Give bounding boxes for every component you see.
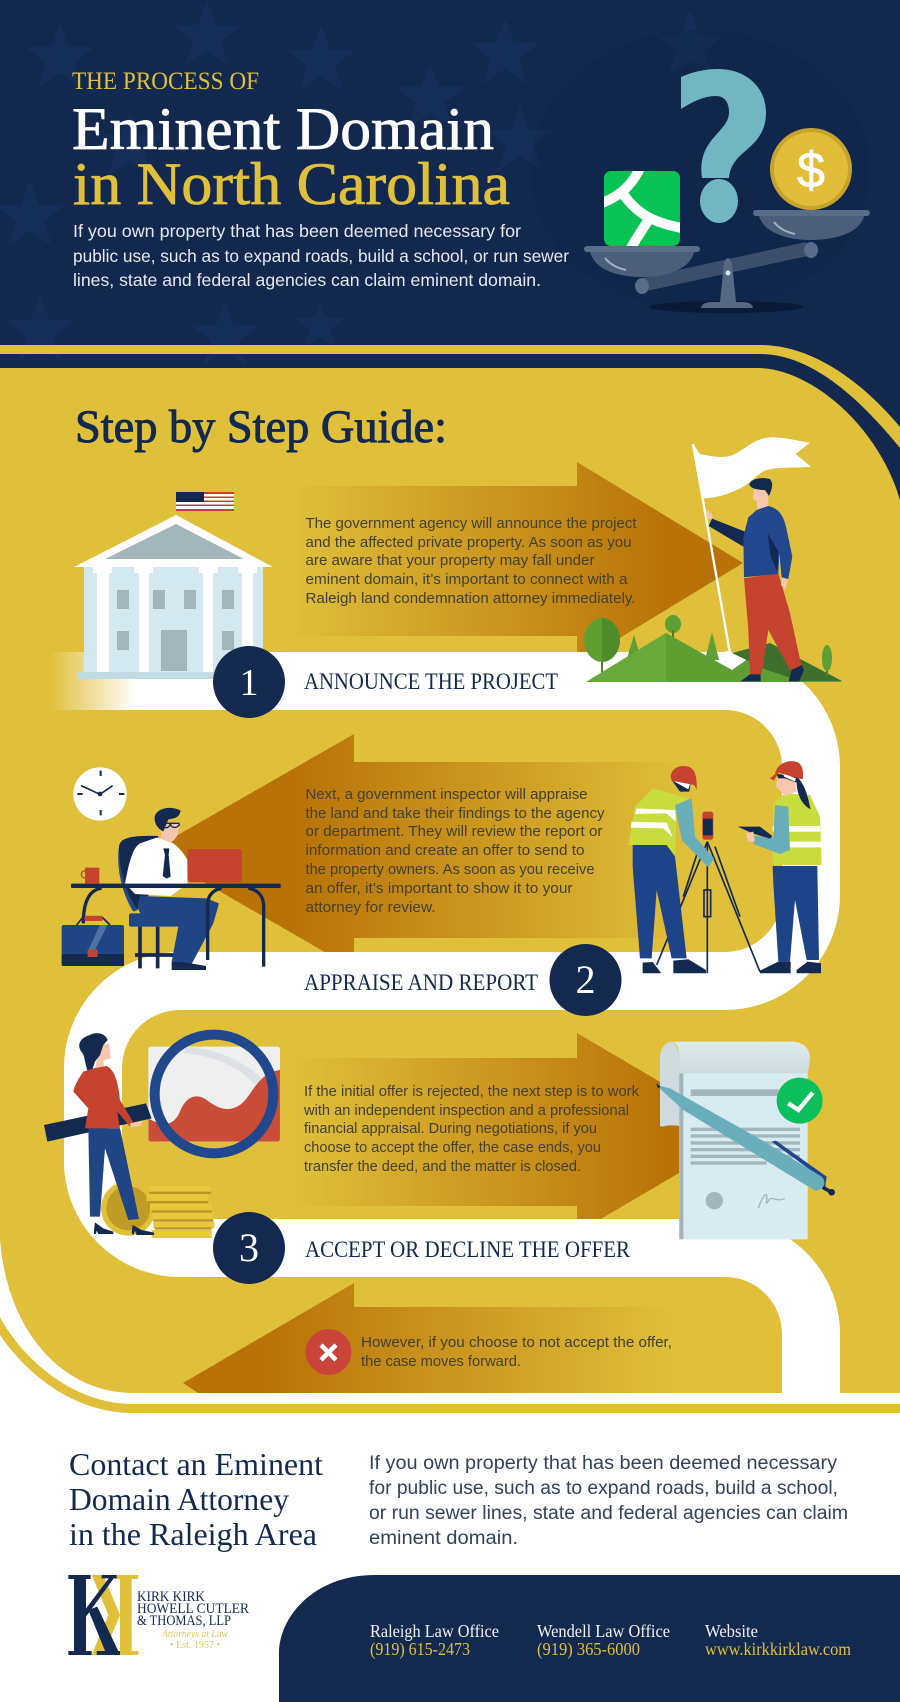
intro paragraph	[73, 221, 569, 290]
text: step 3 description: choose to accept the offer, the case ends, you	[304, 1140, 601, 1156]
logo: kirk kirk howell cutler and thomas	[68, 1575, 249, 1655]
scale base and beam	[635, 242, 818, 313]
red mug	[81, 868, 99, 884]
logo text: KIRK KIRK	[137, 1589, 205, 1605]
arrow: step 4	[183, 1283, 690, 1393]
step 2 badge: 2	[576, 957, 596, 1002]
logo text	[137, 1589, 249, 1651]
clock	[73, 767, 127, 821]
illustration: man at desk with clock	[62, 767, 281, 970]
logo text: • Est. 1957 •	[170, 1640, 220, 1651]
contact heading	[69, 1446, 323, 1552]
text: step 4 description: the case moves forward.	[361, 1354, 521, 1370]
winding white road	[50, 652, 811, 1396]
footer panel	[279, 1575, 900, 1702]
tripod	[657, 812, 760, 973]
intro paragraph: lines, state and federal agencies can claim eminent domain.	[73, 270, 541, 290]
bottom gold stripe	[0, 1317, 900, 1413]
contact: raleigh office: Raleigh Law Office	[370, 1621, 499, 1641]
step 2 label: APPRAISE AND REPORT	[304, 970, 538, 995]
surveyor man	[628, 766, 714, 973]
contact: wendell office: (919) 365-6000	[537, 1639, 640, 1659]
green land parcel	[604, 171, 680, 246]
step 2 badge	[550, 944, 622, 1016]
step 1 label: ANNOUNCE THE PROJECT	[304, 669, 558, 694]
text: step 2 description: an offer, it’s important to show it to your	[306, 881, 573, 897]
text: step 2 description: the property owners. As soon as you receive	[306, 862, 594, 878]
green check badge	[777, 1078, 823, 1124]
chair	[119, 836, 158, 910]
text: step 1 description: The government agency will announce the project	[306, 516, 636, 532]
illustration: scales with question mark	[584, 69, 870, 313]
text: step 1 description: Raleigh land condemnation attorney immediately.	[306, 591, 636, 607]
step 1 badge: 1	[240, 662, 258, 704]
text: step 2 description: Next, a government inspector will appraise	[306, 787, 588, 803]
text: step 2 description: the land and take their findings to the agency	[306, 806, 605, 822]
text: step 3 description: with an independent inspection and a professional	[303, 1103, 629, 1119]
flag pole	[693, 444, 733, 656]
right pan	[753, 210, 870, 240]
contact heading: in the Raleigh Area	[69, 1516, 317, 1552]
desk	[71, 884, 281, 967]
contact: wendell office	[537, 1621, 670, 1659]
intro paragraph: public use, such as to expand roads, build a school, or run sewer	[73, 246, 569, 266]
flag	[693, 437, 811, 498]
arrow: step 3	[290, 1033, 747, 1233]
text: step 1 description: eminent domain, it’s important to connect with a	[306, 572, 628, 588]
text: step 3 description	[303, 1084, 640, 1175]
coins	[101, 1181, 214, 1238]
contact: wendell office: Wendell Law Office	[537, 1621, 670, 1641]
paper	[660, 1042, 810, 1239]
step 3 badge: 3	[239, 1225, 259, 1270]
arrow: step 1	[285, 462, 743, 664]
question mark	[681, 69, 766, 223]
logo mark	[68, 1575, 138, 1655]
illustration: surveyors with tripod	[628, 761, 822, 973]
contact paragraph: for public use, such as to expand roads, build a school,	[369, 1478, 838, 1499]
text: step 2 description	[306, 787, 605, 916]
header background with stars	[0, 0, 900, 520]
briefcase	[62, 916, 124, 966]
logo text: & THOMAS, LLP	[137, 1613, 231, 1629]
surveyor woman	[738, 761, 822, 973]
laptop	[188, 849, 242, 882]
gold main panel	[0, 368, 900, 1393]
text: step 2 description: attorney for review.	[306, 900, 436, 916]
illustration: woman with magnifier, chart and coins	[44, 1033, 280, 1238]
text: step 1 description	[306, 516, 636, 607]
pen	[656, 1083, 835, 1196]
contact paragraph: If you own property that has been deemed necessary	[369, 1453, 838, 1474]
contact: website: www.kirkkirklaw.com	[705, 1639, 851, 1659]
title line 2: in North Carolina	[73, 151, 510, 217]
text: step 2 description: information and create an offer to send to	[306, 843, 584, 859]
illustration: hills and trees	[584, 615, 842, 682]
logo text: Attorneys at Law	[161, 1628, 229, 1640]
contact heading: Contact an Eminent	[69, 1446, 323, 1482]
icon: red x badge	[306, 1329, 352, 1375]
dollar coin: $	[797, 142, 825, 198]
figure	[706, 478, 804, 681]
left pan	[584, 246, 700, 277]
title block	[72, 68, 510, 217]
text: step 3 description: transfer the deed, and the matter is closed.	[304, 1159, 581, 1175]
title line 1: Eminent Domain	[72, 96, 494, 162]
man	[125, 808, 219, 970]
eyebrow: THE PROCESS OF	[72, 68, 259, 95]
chart	[148, 1047, 280, 1142]
illustration: man with white flag	[693, 437, 811, 681]
text: step 1 description: are aware that your property may fall under	[306, 553, 595, 569]
contact paragraph: eminent domain.	[369, 1528, 518, 1549]
contact: website: Website	[705, 1621, 758, 1641]
contact paragraph	[369, 1453, 848, 1549]
contact: raleigh office: (919) 615-2473	[370, 1639, 470, 1659]
contact: raleigh office	[370, 1621, 499, 1659]
illustration: signed document and pen	[656, 1042, 835, 1239]
step 3 label: ACCEPT OR DECLINE THE OFFER	[305, 1237, 631, 1262]
dollar coin	[770, 128, 852, 210]
contact paragraph: or run sewer lines, state and federal agencies can claim	[369, 1503, 848, 1524]
contact heading: Domain Attorney	[69, 1481, 289, 1517]
text: step 1 description: and the affected private property. As soon as you	[306, 535, 632, 551]
magnifier ring	[155, 1035, 273, 1153]
text: step 3 description: financial appraisal. During negotiations, if you	[304, 1121, 597, 1137]
american flag	[176, 492, 234, 511]
woman	[73, 1033, 154, 1235]
contact: website	[705, 1621, 851, 1659]
illustration: government building	[74, 492, 273, 679]
text: step 2 description: or department. They will review the report or	[306, 824, 603, 840]
intro paragraph: If you own property that has been deemed necessary for	[73, 221, 521, 241]
text: step 3 description: If the initial offer is rejected, the next step is to work	[304, 1084, 640, 1100]
text: step 4 description	[361, 1335, 672, 1370]
handle	[44, 1103, 152, 1142]
gold outer stripe	[0, 345, 900, 448]
text: step 4 description: However, if you choose to not accept the offer,	[361, 1335, 672, 1351]
step 3 badge	[213, 1212, 285, 1284]
heading: step by step guide: Step by Step Guide:	[75, 401, 447, 453]
step 1 badge	[213, 646, 285, 718]
logo text: HOWELL CUTLER	[137, 1601, 249, 1617]
arrow: step 2	[150, 734, 690, 969]
